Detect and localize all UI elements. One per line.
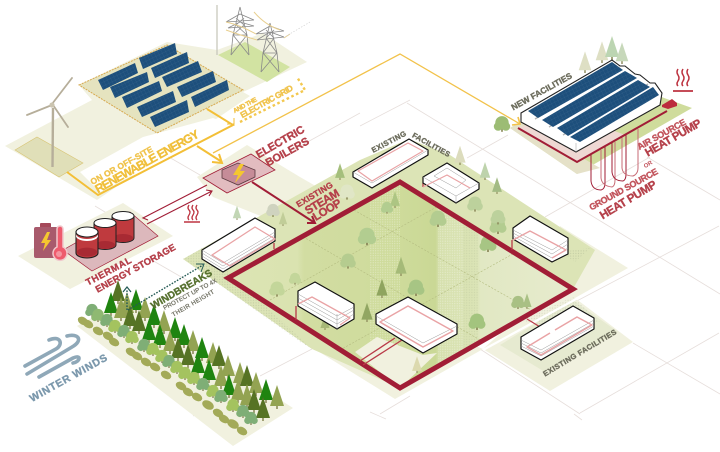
label: existing: EXISTING xyxy=(294,179,335,209)
label: and the: AND THE xyxy=(232,96,259,115)
label: protect up to 4x: PROTECT UP TO 4X xyxy=(162,277,219,312)
ground: main beige xyxy=(300,330,483,399)
electric boiler xyxy=(203,154,275,193)
new facilities site xyxy=(494,36,692,190)
label: thermal: THERMAL xyxy=(84,255,134,288)
building: loop west xyxy=(298,282,354,329)
arrow: boiler to steam loop xyxy=(252,182,315,223)
ground: dotted fringe west xyxy=(183,248,312,349)
ground: east building fringe xyxy=(500,300,618,372)
arrows: boiler and thermal storage xyxy=(143,185,212,224)
white gap beside loop xyxy=(483,298,578,350)
power lines and pylons xyxy=(217,5,310,82)
ground: renewable energy site xyxy=(5,33,307,200)
label: electric grid: ELECTRIC GRID xyxy=(238,83,295,120)
long yellow supply line xyxy=(213,54,520,153)
tank xyxy=(112,212,134,242)
ground: road gap xyxy=(80,118,230,192)
wind turbine xyxy=(15,78,83,177)
label: steam: STEAM xyxy=(303,187,342,217)
ground: boiler pad xyxy=(197,145,340,225)
tank xyxy=(76,227,98,258)
ground: campus green xyxy=(183,139,595,388)
labels xyxy=(28,70,704,405)
label: new facilities: NEW FACILITIES xyxy=(509,70,574,112)
building: southeast existing xyxy=(521,306,594,360)
windbreak ground xyxy=(77,300,293,446)
label: heat pump air: HEAT PUMP xyxy=(643,117,704,159)
ground source heat pump loops xyxy=(591,129,638,190)
icon: heat xyxy=(184,205,200,222)
campus interior inside steam loop xyxy=(228,180,573,390)
icon: heat xyxy=(673,69,693,91)
icon: winter winds xyxy=(25,335,79,377)
label: loop: LOOP xyxy=(311,197,344,224)
label: existing facilities southeast: EXISTING FACILITIES xyxy=(541,327,618,378)
label: winter winds: WINTER WINDS xyxy=(28,352,110,405)
conifer rows xyxy=(104,280,284,421)
ground: thermal storage pad xyxy=(18,203,173,289)
label: or: OR xyxy=(643,160,654,170)
solar field xyxy=(79,43,243,133)
label: existing north: EXISTING xyxy=(370,129,408,155)
round tree row xyxy=(85,304,258,425)
heat pump line xyxy=(518,111,667,162)
building: east in loop xyxy=(513,216,568,262)
label: facilities north: FACILITIES xyxy=(411,131,452,159)
renewable energy lines xyxy=(67,109,234,195)
tree beside new facilities xyxy=(494,116,510,132)
shrub row xyxy=(76,315,249,437)
windbreak arrows xyxy=(123,264,204,310)
icon: thermometer xyxy=(53,226,67,260)
icon: battery xyxy=(34,223,58,258)
trees behind new facilities xyxy=(579,36,628,73)
thermal storage xyxy=(34,212,158,271)
label: boilers: BOILERS xyxy=(264,135,311,169)
label: on or off-site: ON OR OFF-SITE xyxy=(89,144,155,187)
label: renewable energy: RENEWABLE ENERGY xyxy=(93,127,202,196)
steam loop branches xyxy=(274,183,550,365)
building: central xyxy=(376,297,457,353)
air source heat pump unit xyxy=(662,99,677,109)
building: north existing long xyxy=(353,139,428,188)
label: ground source: GROUND SOURCE xyxy=(587,166,660,212)
label: windbreaks: WINDBREAKS xyxy=(149,268,215,312)
building: north existing square xyxy=(423,163,479,203)
electric grid dashed line xyxy=(240,77,305,122)
steam loop xyxy=(228,182,573,388)
building: existing west xyxy=(202,218,275,272)
rooftop solar panels xyxy=(528,62,659,142)
label: heat pump ground: HEAT PUMP xyxy=(598,179,659,222)
tank xyxy=(94,218,116,250)
label: their height: THEIR HEIGHT xyxy=(171,289,216,319)
ground: beige east xyxy=(483,226,633,391)
label: electric: ELECTRIC xyxy=(254,124,307,161)
windbreak trees xyxy=(76,280,284,437)
label: energy storage: ENERGY STORAGE xyxy=(94,242,178,295)
trees on campus xyxy=(233,146,532,373)
label: air source: AIR SOURCE xyxy=(636,117,688,152)
new facilities building xyxy=(521,60,662,152)
